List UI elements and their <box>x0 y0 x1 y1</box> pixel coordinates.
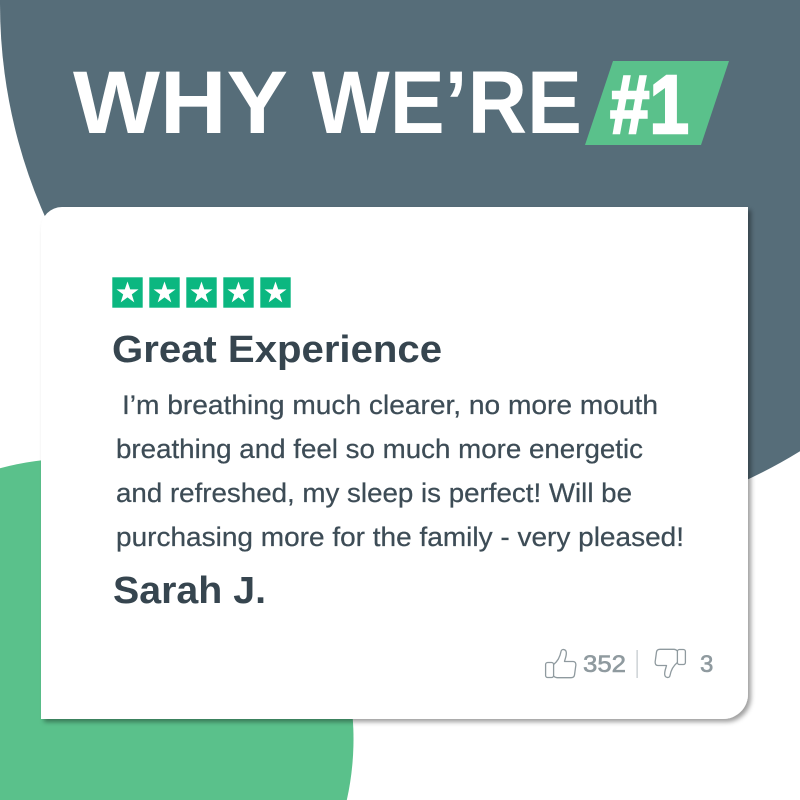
badge: #1: #1 <box>610 58 689 151</box>
title text <box>73 52 582 152</box>
star rating <box>112 277 291 308</box>
icon: thumbs down <box>655 649 685 677</box>
dislike count: 3 <box>700 651 713 678</box>
panel: review card <box>41 207 748 719</box>
review body: breathing and feel so much more energetic <box>116 434 643 464</box>
card background <box>41 207 748 719</box>
like count: 352 <box>583 651 626 678</box>
badge: #1 <box>585 58 729 151</box>
title <box>73 52 729 152</box>
reviewer name: Sarah J. <box>113 570 266 612</box>
background shape: dark slate circle <box>0 0 800 529</box>
background shape: green circle <box>0 459 354 800</box>
vote divider <box>637 650 638 678</box>
review body: I’m breathing much clearer, no more mouth <box>122 390 658 420</box>
review body: purchasing more for the family - very pleased! <box>116 522 684 552</box>
review body: and refreshed, my sleep is perfect! Will be <box>116 478 632 508</box>
review heading: Great Experience <box>112 329 442 371</box>
title text: WE’RE <box>312 52 582 152</box>
vote counts <box>546 649 713 678</box>
review body <box>116 390 684 552</box>
icon: thumbs up <box>546 650 576 678</box>
title text: WHY <box>73 52 288 152</box>
